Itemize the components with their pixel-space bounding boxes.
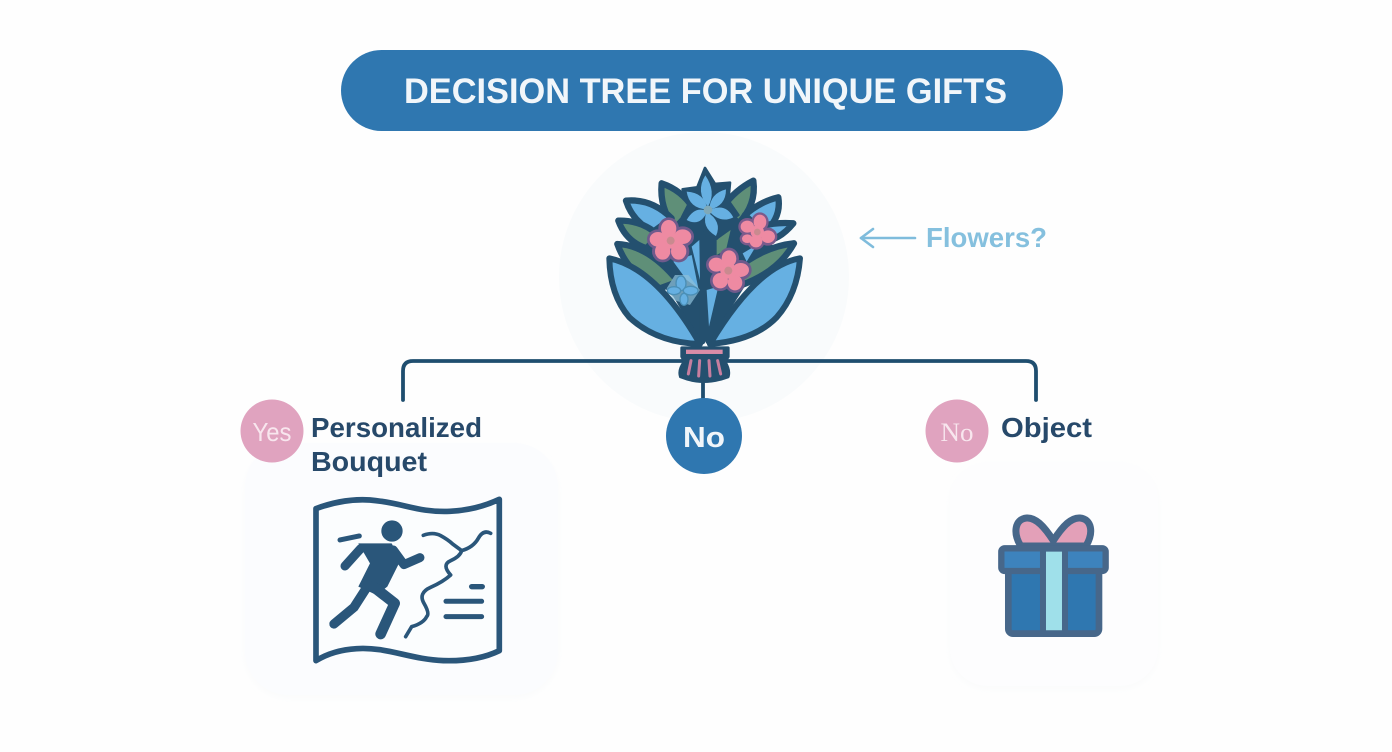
- back leaves: [617, 181, 794, 288]
- label: flowers question: Flowers?: [926, 222, 1047, 253]
- label: personalized bouquet: Personalized: [311, 412, 482, 443]
- bow: [1016, 518, 1091, 546]
- panel: object card: [950, 462, 1158, 686]
- pink flower right: [740, 214, 775, 248]
- blue star flower: [682, 168, 738, 239]
- badge: Yes: Yes: [252, 417, 292, 447]
- coastline: [406, 532, 491, 637]
- badge: No: [926, 400, 988, 462]
- icon: running figure on map: [316, 499, 499, 661]
- label: personalized bouquet: Bouquet: [311, 446, 427, 477]
- arrow: points to bouquet: [861, 229, 915, 247]
- node: No center: No: [683, 422, 725, 454]
- badge: Yes: [240, 400, 304, 462]
- icon: flower bouquet: [609, 168, 800, 381]
- connector lines: [403, 361, 1036, 402]
- icon: gift box: [1001, 518, 1106, 634]
- dark mass behind the bouquet: [647, 207, 773, 342]
- bouquet tie: [680, 348, 729, 381]
- panel: personalized bouquet card: [245, 443, 558, 695]
- box lid: [1001, 548, 1106, 571]
- runner: [381, 520, 403, 542]
- label: personalized bouquet: [311, 412, 482, 477]
- badge: No: No: [940, 418, 974, 447]
- large wrap leaves: [609, 258, 800, 344]
- node: No center: [666, 398, 742, 474]
- ribbon: [1043, 549, 1065, 633]
- title banner: DECISION TREE FOR UNIQUE GIFTS: [404, 72, 1007, 111]
- box body: [1008, 568, 1099, 634]
- pink flower left: [649, 220, 692, 260]
- inner blue wedges: [673, 230, 757, 327]
- small blue flower: [667, 275, 700, 305]
- halo behind bouquet: [559, 132, 849, 422]
- text lines: [472, 579, 482, 595]
- label: object: Object: [1001, 412, 1092, 443]
- title banner: [341, 50, 1063, 131]
- map outline: [316, 499, 499, 661]
- pink flower center: [708, 250, 749, 291]
- stems: [703, 237, 723, 342]
